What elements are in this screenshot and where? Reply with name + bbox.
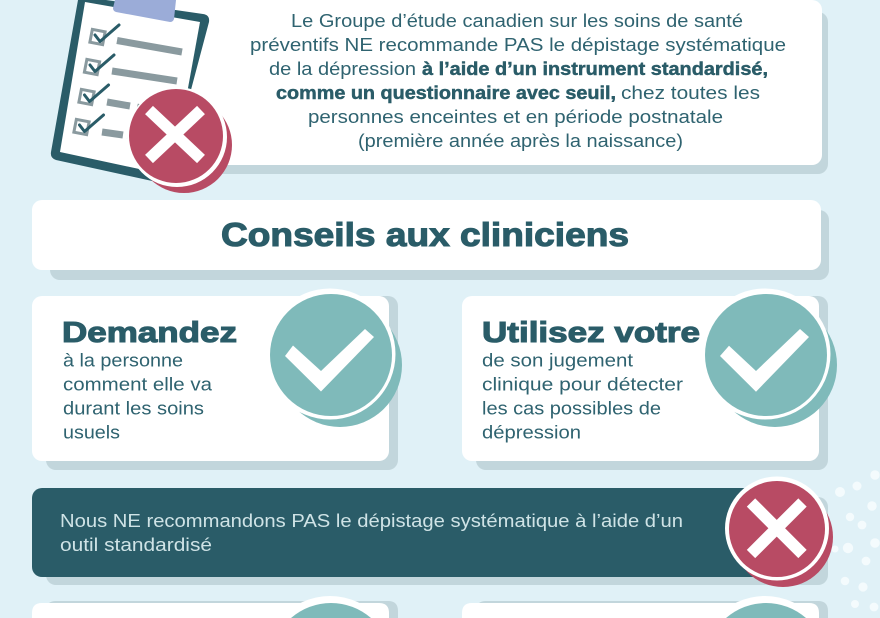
card text: les cas possibles de	[482, 398, 661, 418]
card text	[63, 350, 213, 442]
icon: check mark	[264, 288, 402, 427]
card text	[482, 350, 683, 442]
recommendation text: de la dépression	[269, 59, 416, 79]
panel: recommendation	[130, 0, 828, 174]
panel: Utilisez votre	[462, 288, 837, 470]
card text: dépression	[482, 422, 581, 442]
card title: Utilisez votre	[482, 317, 700, 349]
recommendation text: chez toutes les	[621, 83, 760, 103]
card text: à la personne	[63, 350, 183, 370]
warning text	[60, 511, 683, 555]
icon: check mark	[281, 596, 379, 618]
card text: durant les soins	[63, 398, 204, 418]
recommendation text: comme un questionnaire avec seuil,	[276, 83, 616, 103]
recommendation text: personnes enceintes et en période postnatale	[308, 107, 723, 127]
recommendation text: Le Groupe d’étude canadien sur les soins de santé	[291, 11, 743, 31]
recommendation text: préventifs NE recommande PAS le dépistage systématique	[250, 35, 786, 55]
panel: Demandez	[32, 288, 402, 470]
panel: heading	[32, 200, 829, 280]
warning text: outil standardisé	[60, 535, 212, 555]
card text: usuels	[63, 422, 120, 442]
card text: comment elle va	[63, 374, 213, 394]
icon: red cross on clipboard	[127, 87, 232, 193]
heading text: Conseils aux cliniciens	[221, 216, 629, 253]
icon: check mark	[700, 288, 837, 427]
icon: clipboard with crossed-out checklist	[51, 0, 209, 184]
warning text: Nous NE recommandons PAS le dépistage systématique à l’aide d’un	[60, 511, 683, 531]
card text: clinique pour détecter	[482, 374, 683, 394]
icon: red cross	[725, 476, 833, 587]
panel: lower right card	[462, 596, 828, 618]
panel: lower left card	[32, 596, 398, 618]
card text: de son jugement	[482, 350, 633, 370]
recommendation text: (première année après la naissance)	[358, 131, 683, 151]
card title: Demandez	[62, 317, 237, 349]
panel: warning bar	[32, 476, 833, 587]
icon: check mark	[716, 596, 814, 618]
recommendation text	[250, 11, 786, 151]
recommendation text: à l’aide d’un instrument standardisé,	[422, 59, 768, 79]
